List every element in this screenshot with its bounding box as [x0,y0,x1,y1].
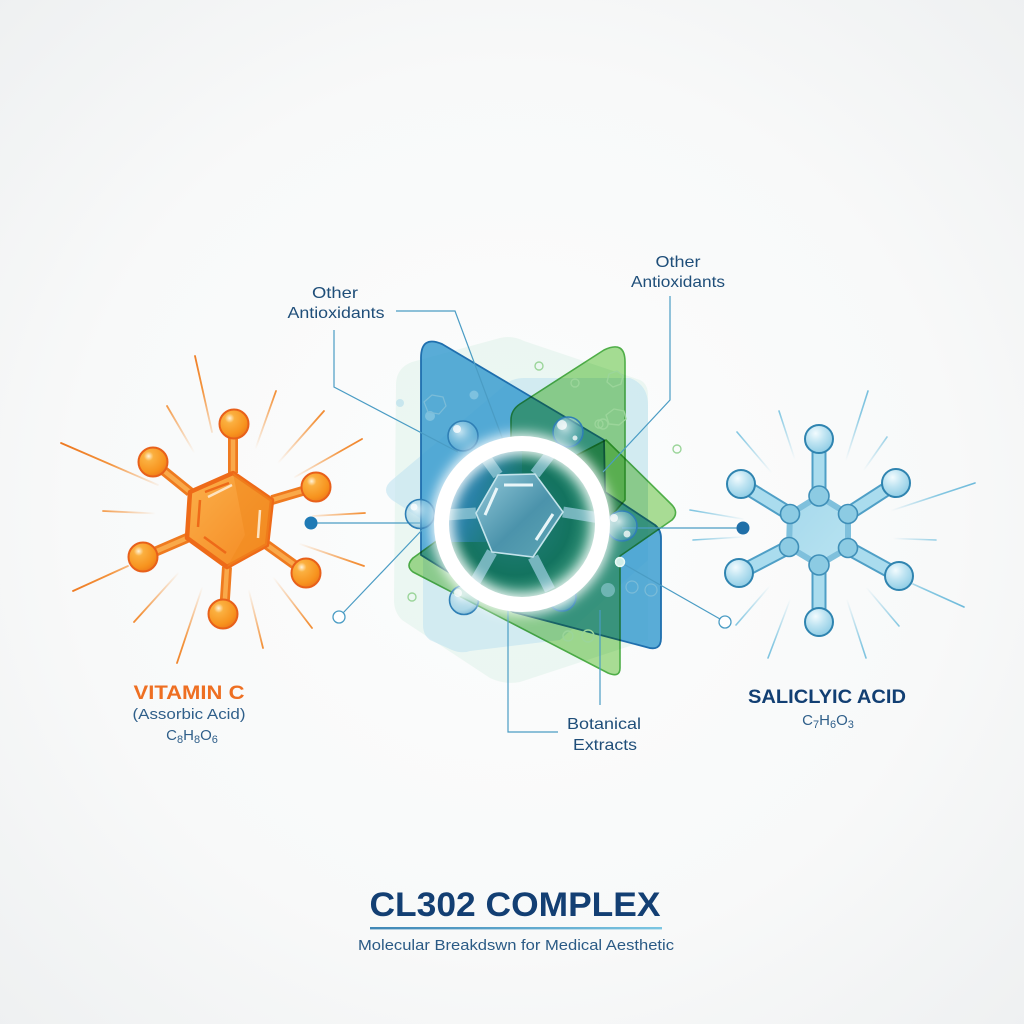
central ring with molecule core [440,440,610,610]
label: other antioxidants left: Antioxidants [288,305,384,322]
title block [358,886,674,954]
blue panel [421,341,661,648]
label: botanical extracts: Extracts [573,737,637,754]
label: other antioxidants left [288,285,384,322]
orange rays [61,356,365,663]
salicylic acid formula: H [819,712,830,729]
pale blue backing panel [386,378,648,652]
salicylic acid formula: 6 [830,719,836,731]
salicylic acid formula: O [836,712,848,729]
ring glow [442,444,602,604]
green panel lower triangle [409,440,676,675]
core background [449,452,595,592]
panel: central translucent layers [386,337,681,683]
subtitle: Molecular Breakdswn for Medical Aesthetic [358,938,674,954]
label: vitamin C [132,683,246,746]
green panel upper right [511,347,625,575]
vitamin C chemical name: (Assorbic Acid) [132,706,246,723]
salicylic acid formula: C [802,712,813,729]
connector end dots [304,516,750,628]
vitamin C formula: 8 [177,734,183,746]
salicylic acid formula: 7 [813,719,819,731]
salicylic acid name: SALICLYIC ACID [748,687,906,708]
orange atoms [128,410,330,628]
vitamin C formula: H [183,727,194,744]
core hexagon [476,474,563,557]
blue hexagon [789,496,848,565]
core spokes [445,450,600,590]
label: salicylic acid [748,687,906,731]
connector lines [317,296,737,732]
label: other antioxidants right [631,254,725,291]
blue rays [690,391,975,658]
title underline [370,927,662,929]
label: botanical extracts [567,716,641,754]
label: botanical extracts: Botanical [567,716,641,733]
vitamin C formula: O [200,727,212,744]
molecule: salicylic acid [690,391,975,658]
vitamin C formula: 8 [194,734,200,746]
molecule: vitamin C [61,356,365,663]
label: other antioxidants right: Antioxidants [631,274,725,291]
vitamin C formula: C [166,727,177,744]
orange bonds [143,430,316,614]
pale green backing panel [394,337,648,683]
vitamin C name: VITAMIN C [134,683,245,704]
vitamin C formula: 6 [212,734,218,746]
bubbles around the ring [406,417,637,614]
orange hexagon [187,473,272,567]
title: CL302 COMPLEX [370,886,661,924]
blue bonds [739,439,899,622]
small decorative circles and hexagons [408,362,681,642]
label: other antioxidants right: Other [656,254,701,271]
white ring [442,444,602,604]
blue atoms [725,425,913,636]
salicylic acid formula: 3 [848,719,854,731]
blue inner nodes [780,486,858,575]
label: other antioxidants left: Other [312,285,359,302]
